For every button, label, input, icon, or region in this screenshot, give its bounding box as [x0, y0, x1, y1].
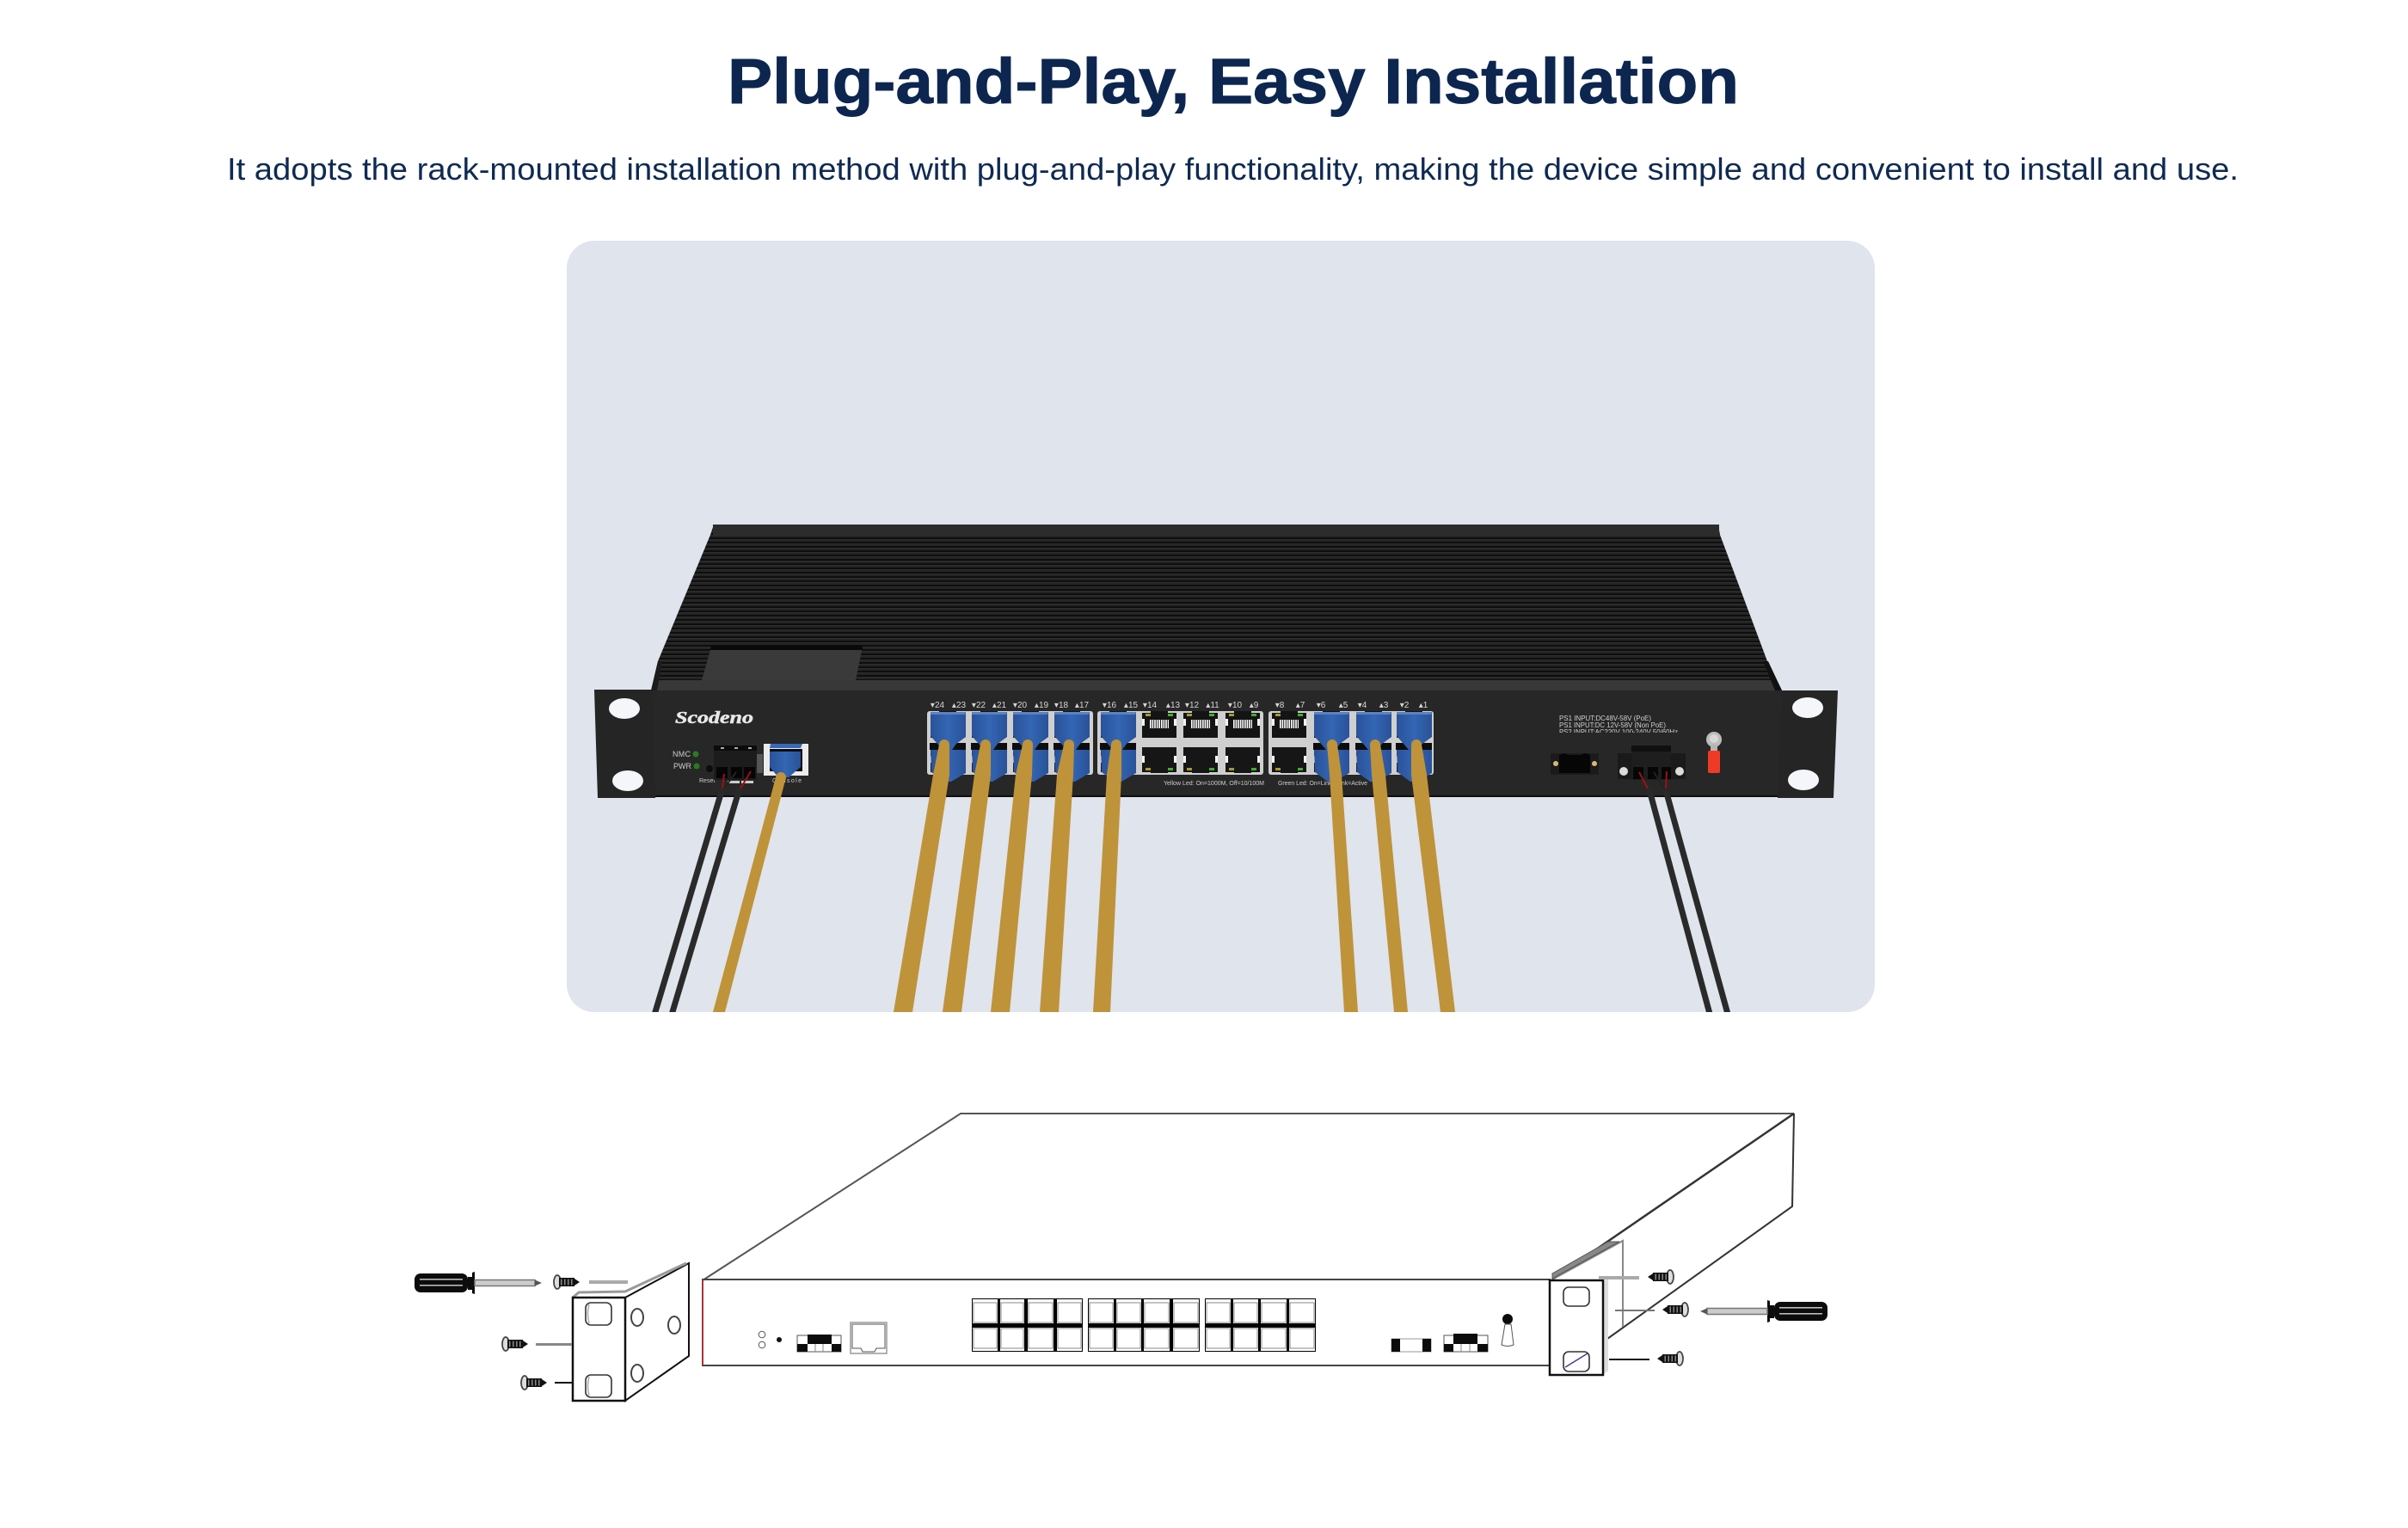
- LED legend text: Green Led: On=Link, Blink=Active: [1278, 779, 1367, 787]
- port number labels: ▾14: [1143, 701, 1158, 710]
- port number labels: ▴7: [1296, 701, 1305, 710]
- console port with plug: [764, 744, 808, 784]
- grounding lug: [1706, 732, 1722, 773]
- left bracket: [573, 1263, 689, 1401]
- right terminal outline: [1444, 1334, 1488, 1352]
- panel: product photo background: [567, 241, 1875, 1012]
- status LEDs: PWR: [673, 762, 691, 770]
- port number labels: ▴1: [1419, 701, 1428, 710]
- left panel indicators: [759, 1331, 782, 1348]
- port number labels: ▴5: [1339, 701, 1348, 710]
- LED legend text: [1164, 781, 1367, 786]
- DC connector outline: [1391, 1339, 1431, 1352]
- port number labels: ▴9: [1250, 701, 1259, 710]
- panel: rack-mounted switch with cables: [594, 525, 1838, 1023]
- port number labels: ▾24: [931, 701, 945, 710]
- switch front panel: [651, 690, 1783, 797]
- left terminal outline: [797, 1335, 841, 1352]
- power input labels: PS1 INPUT:DC48V-58V (PoE): [1559, 714, 1651, 722]
- right screws and guide lines: [1599, 1270, 1688, 1365]
- status LEDs: [673, 750, 715, 784]
- ethernet cables left group: [894, 739, 1121, 1012]
- left mounting ear: [594, 690, 655, 798]
- LED legend text: Yellow Led: On=1000M, Off=10/100M: [1164, 779, 1264, 787]
- port number labels: ▾20: [1013, 701, 1028, 710]
- installation line drawing: [415, 1114, 1828, 1401]
- left screws and guide lines: [502, 1275, 628, 1390]
- port number labels: ▴23: [952, 701, 967, 710]
- console port outline: [851, 1322, 887, 1353]
- port grid: [972, 1298, 1316, 1352]
- port number labels: ▴19: [1035, 701, 1049, 710]
- port number labels: ▴13: [1166, 701, 1181, 710]
- right bracket: [1550, 1241, 1623, 1375]
- port number labels: ▾10: [1228, 701, 1243, 710]
- right power wires: [1639, 771, 1730, 1023]
- port number labels: ▾18: [1054, 701, 1069, 710]
- port number labels: ▾6: [1317, 701, 1326, 710]
- port number labels: [931, 702, 1428, 708]
- brand logo: Scodeno: [675, 709, 753, 727]
- front panel bottom edge: [655, 795, 1778, 797]
- port number labels: ▾16: [1103, 701, 1117, 710]
- subtitle text: It adopts the rack-mounted installation method with plug-and-play functionality, making the device simple and convenient to install and use.: [227, 151, 2239, 187]
- RJ45 ports: [931, 711, 1431, 773]
- port number labels: ▾12: [1185, 701, 1200, 710]
- switch outline: [703, 1114, 1794, 1365]
- switch top heat-sink: [651, 525, 1782, 690]
- port number labels: ▾2: [1400, 701, 1410, 710]
- DC connector: [1551, 753, 1599, 775]
- power input labels: PS1 INPUT:DC 12V-58V (Non PoE): [1559, 721, 1666, 729]
- right mounting ear: [1778, 690, 1838, 798]
- port number labels: ▴17: [1075, 701, 1090, 710]
- port number labels: ▾8: [1275, 701, 1285, 710]
- right terminal block: [1618, 746, 1686, 780]
- RJ45 port frames: [927, 711, 1434, 775]
- console ethernet cable: [713, 772, 786, 1012]
- right screwdriver: [1700, 1300, 1828, 1322]
- port number labels: ▴21: [992, 701, 1007, 710]
- ethernet cables right group: [1327, 739, 1455, 1012]
- ground lug outline: [1502, 1314, 1514, 1347]
- port number labels: ▴11: [1206, 701, 1219, 710]
- left terminal block: [714, 746, 763, 783]
- port number labels: ▴15: [1124, 701, 1139, 710]
- port number labels: ▴3: [1379, 701, 1389, 710]
- left screwdriver: [415, 1272, 542, 1294]
- port number labels: ▾4: [1358, 701, 1367, 710]
- status LEDs: Reset: [699, 778, 715, 784]
- blue RJ45 plugs: [930, 712, 1432, 782]
- console port with plug: Console: [772, 778, 802, 784]
- title: Plug-and-Play, Easy Installation: [728, 46, 1739, 117]
- left power wires: [652, 771, 751, 1023]
- power input labels: [1560, 715, 1678, 733]
- port number labels: ▾22: [972, 701, 986, 710]
- status LEDs: NMC: [673, 750, 691, 758]
- power input labels: PS2 INPUT:AC220V 100-240V 50/60Hz: [1559, 727, 1678, 736]
